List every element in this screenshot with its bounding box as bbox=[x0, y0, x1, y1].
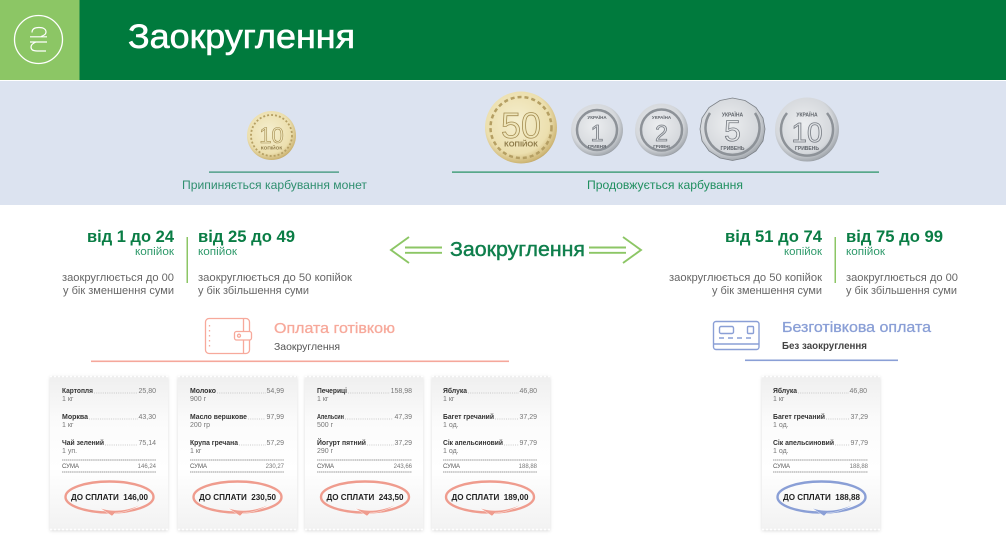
receipt 4 bbox=[432, 376, 550, 530]
rule: 51 to 74: у бік зменшення суми bbox=[712, 285, 822, 297]
icon: bank card bbox=[714, 322, 759, 350]
receipt 5 bbox=[762, 376, 880, 530]
receipt 2: 1 кг bbox=[190, 448, 202, 455]
caption: continued: Продовжується карбування bbox=[587, 178, 743, 192]
coin: 5 hryven bbox=[700, 98, 765, 160]
rule: 51 to 74 bbox=[669, 228, 823, 297]
coin: 10 hryven: ГРИВЕНЬ bbox=[795, 146, 819, 152]
receipt 4: 46,80 bbox=[519, 388, 537, 395]
coin: 5 hryven: УКРАЇНА bbox=[722, 112, 744, 118]
coin: 2 hryvni: ГРИВНІ bbox=[653, 144, 670, 149]
coin: 5 hryven: ГРИВЕНЬ bbox=[721, 146, 745, 152]
panel: coins bbox=[0, 81, 1006, 205]
rule: 51 to 74: заокруглюється до 50 копійок bbox=[669, 272, 822, 284]
receipt 4: 97,79 bbox=[519, 440, 537, 447]
receipt 3 bbox=[305, 376, 423, 530]
rule: 25 to 49: заокруглюється до 50 копійок bbox=[198, 272, 352, 284]
receipt 1: СУМА bbox=[62, 464, 79, 470]
rule: 75 to 99: заокруглюється до 00 bbox=[846, 272, 958, 284]
coin: 1 hryvnia bbox=[571, 104, 623, 156]
receipt 1: 75,14 bbox=[138, 440, 156, 447]
heading: cash payment: Оплата готівкою bbox=[274, 321, 395, 337]
receipt 2: 57,29 bbox=[266, 440, 284, 447]
receipt 2: 230,27 bbox=[266, 464, 285, 470]
rule: 1 to 24: заокруглюється до 00 bbox=[62, 272, 174, 284]
receipt 4: ДО СПЛАТИ 189,00 bbox=[452, 492, 529, 502]
logo tile bbox=[0, 0, 80, 80]
coin: 1 hryvnia: 1 bbox=[591, 120, 603, 146]
caption: stopped: Припиняється карбування монет bbox=[182, 178, 368, 192]
receipt 2: Масло вершкове bbox=[190, 414, 247, 421]
receipt 5: 97,79 bbox=[850, 440, 868, 447]
receipt 3: 500 г bbox=[317, 422, 334, 429]
receipt 3: ДО СПЛАТИ 243,50 bbox=[326, 492, 404, 502]
rule: 75 to 99: від 75 до 99 bbox=[846, 228, 943, 246]
line: stopped bbox=[209, 172, 339, 173]
receipt 3: 290 г bbox=[317, 448, 334, 455]
receipt 1: Морква bbox=[62, 414, 88, 421]
rule: 25 to 49: копійок bbox=[198, 246, 237, 258]
coin: 10 hryven: 10 bbox=[791, 117, 823, 148]
rule: 75 to 99: у бік збільшення суми bbox=[846, 285, 957, 297]
rule: 25 to 49: від 25 до 49 bbox=[198, 228, 295, 246]
receipt 4: 1 кг bbox=[443, 396, 455, 403]
arrow left bbox=[391, 237, 442, 263]
receipt 3: 47,39 bbox=[394, 414, 412, 421]
receipt 3: 243,66 bbox=[394, 464, 413, 470]
receipt 3: Апельсин bbox=[317, 414, 344, 421]
receipt 4: 37,29 bbox=[519, 414, 537, 421]
coin: 50 kopiyok bbox=[485, 92, 557, 164]
receipt 1: 1 кг bbox=[62, 396, 74, 403]
receipt 2: Крупа гречана bbox=[190, 440, 238, 447]
receipt 2: СУМА bbox=[190, 464, 207, 470]
receipt 1: ДО СПЛАТИ 146,00 bbox=[71, 492, 148, 502]
coin: 2 hryvni bbox=[635, 104, 688, 156]
receipt 1 bbox=[50, 376, 168, 530]
line: cash bbox=[91, 360, 509, 362]
coin: 50 kopiyok: 50 bbox=[501, 105, 541, 146]
rule: 75 to 99 bbox=[846, 228, 958, 297]
receipt 5: 1 кг bbox=[773, 396, 785, 403]
receipt 5: 46,80 bbox=[849, 388, 867, 395]
receipt 3: 1 кг bbox=[317, 396, 329, 403]
coin: 5 hryven: 5 bbox=[724, 115, 741, 148]
rule: 1 to 24: у бік зменшення суми bbox=[63, 285, 174, 297]
receipt 5: Багет гречаний bbox=[773, 413, 825, 421]
receipt 4: Багет гречаний bbox=[443, 413, 494, 421]
receipt 2: 97,99 bbox=[266, 414, 284, 421]
receipt 5: 1 од. bbox=[773, 422, 789, 429]
coin: 1 hryvnia: ГРИВНЯ bbox=[588, 144, 606, 149]
receipt 4: Яблука bbox=[443, 387, 467, 395]
rule: 1 to 24: копійок bbox=[135, 246, 174, 258]
receipt 2: Молоко bbox=[190, 388, 216, 395]
receipt 3: Йогурт пятний bbox=[317, 438, 366, 447]
rule: 1 to 24: від 1 до 24 bbox=[87, 228, 175, 246]
receipt 4: СУМА bbox=[443, 464, 460, 470]
coin: 10 hryven bbox=[775, 98, 839, 162]
receipt 4: 188,88 bbox=[519, 464, 538, 470]
line: continued bbox=[452, 172, 879, 173]
receipt 5: 1 од. bbox=[773, 448, 789, 455]
coin: 10 kopiyok bbox=[247, 111, 296, 160]
coin: 1 hryvnia: УКРАЇНА bbox=[587, 114, 607, 120]
subheading: rounding: Заокруглення bbox=[274, 341, 340, 353]
arrow right bbox=[589, 237, 641, 263]
receipt 1: 43,30 bbox=[138, 414, 156, 421]
rule: 75 to 99: копійок bbox=[846, 246, 885, 258]
heading: rounding: Заокруглення bbox=[450, 238, 585, 261]
receipt 3: СУМА bbox=[317, 464, 334, 470]
receipt 2: 900 г bbox=[190, 396, 207, 403]
coin: 50 kopiyok: КОПІЙОК bbox=[504, 140, 538, 148]
receipt 5: 37,29 bbox=[850, 414, 868, 421]
receipt 2: 54,99 bbox=[266, 388, 284, 395]
rule: 25 to 49: у бік збільшення суми bbox=[198, 285, 309, 297]
receipt 4: Сік апельсиновий bbox=[443, 439, 503, 447]
icon: wallet bbox=[206, 318, 252, 354]
receipt 3: 158,98 bbox=[391, 388, 412, 395]
receipt 1: 1 уп. bbox=[62, 448, 77, 455]
receipt 5: СУМА bbox=[773, 464, 790, 470]
receipt 2: ДО СПЛАТИ 230,50 bbox=[199, 492, 276, 502]
receipt 3: Печериці bbox=[317, 387, 347, 395]
divider right bbox=[834, 237, 836, 283]
coin: 10 kopiyok: КОПІЙОК bbox=[261, 144, 282, 152]
receipt 1: 1 кг bbox=[62, 422, 74, 429]
coin: 2 hryvni: УКРАЇНА bbox=[652, 114, 672, 120]
receipt 1: Чай зелений bbox=[62, 439, 104, 447]
receipt 5: Сік апельсиновий bbox=[773, 439, 834, 447]
receipt 2: 200 гр bbox=[190, 422, 210, 429]
coin: 10 kopiyok: 10 bbox=[259, 123, 284, 148]
receipt 1: 25,80 bbox=[138, 388, 156, 395]
subheading: no rounding: Без заокруглення bbox=[782, 340, 867, 352]
rule: 25 to 49 bbox=[198, 228, 352, 297]
receipt 1: 146,24 bbox=[138, 464, 157, 470]
receipt 2 bbox=[178, 376, 297, 530]
receipt 4: 1 од. bbox=[443, 422, 459, 429]
receipt 5: 188,88 bbox=[850, 464, 869, 470]
receipt 5: ДО СПЛАТИ 188,88 bbox=[783, 492, 860, 502]
receipt 4: 1 од. bbox=[443, 448, 459, 455]
coin: 2 hryvni: 2 bbox=[655, 120, 668, 146]
header bar bbox=[0, 0, 1006, 80]
coin: 10 hryven: УКРАЇНА bbox=[796, 112, 818, 118]
receipt 1: Картопля bbox=[62, 388, 93, 395]
heading: cashless payment: Безготівкова оплата bbox=[782, 320, 932, 336]
receipt 5: Яблука bbox=[773, 387, 797, 395]
title: Заокруглення bbox=[128, 18, 355, 56]
line: cashless bbox=[745, 360, 898, 361]
rule: 51 to 74: від 51 до 74 bbox=[725, 228, 823, 246]
rule: 51 to 74: копійок bbox=[784, 246, 822, 258]
rule: 1 to 24 bbox=[62, 228, 175, 297]
divider left bbox=[186, 237, 188, 283]
receipt 3: 37,29 bbox=[394, 440, 412, 447]
